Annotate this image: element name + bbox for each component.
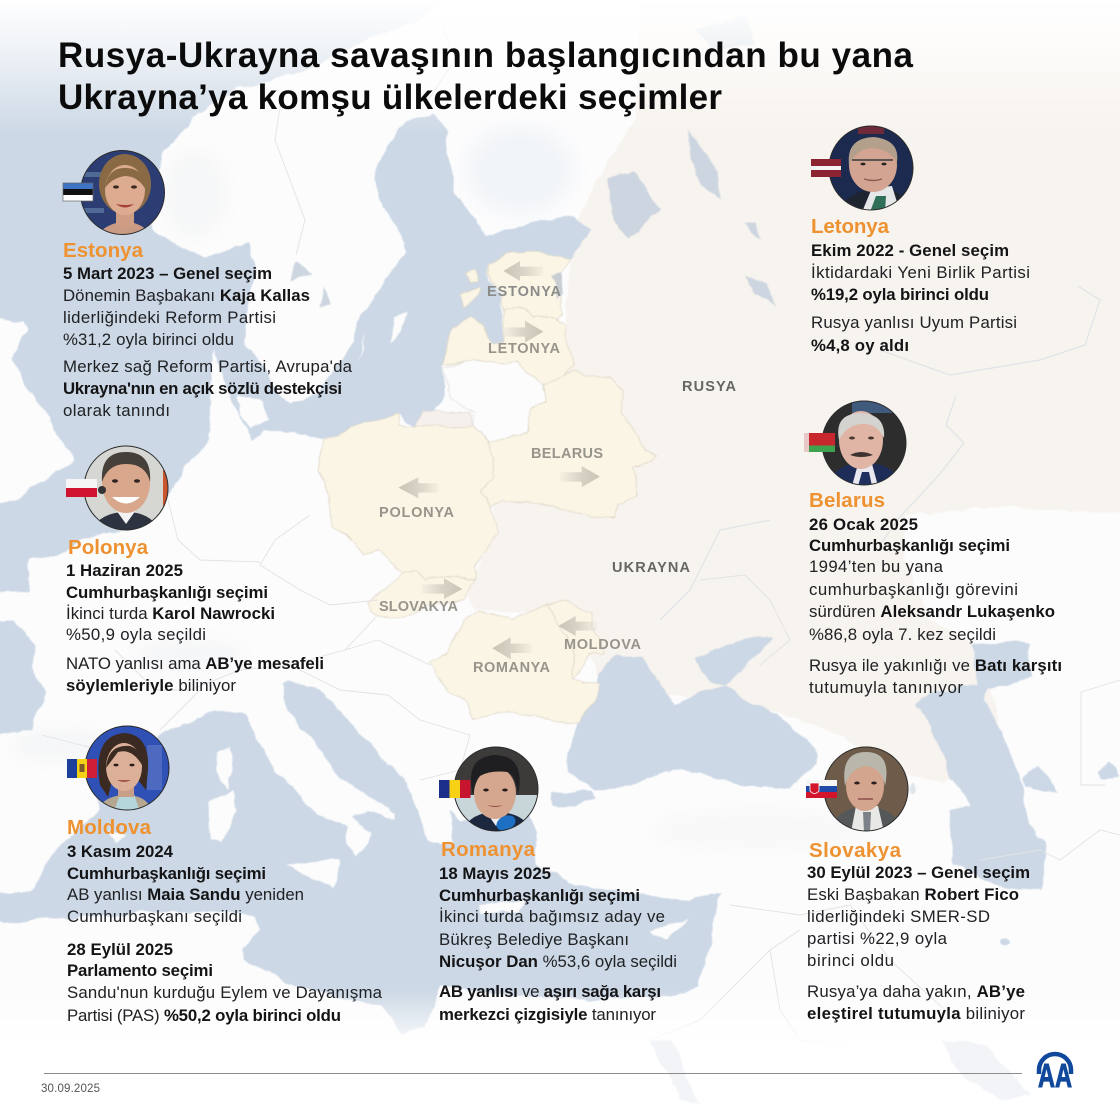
title [58, 36, 914, 117]
bottom fade [0, 990, 1120, 1050]
text: election details: 5 Mart 2023 – Genel seçim [63, 264, 272, 283]
footer rule [44, 1073, 1022, 1074]
arrow: Romania turns west [492, 637, 532, 659]
text: election details: Ekim 2022 - Genel seçim [811, 241, 1009, 260]
rivers, Russia [660, 286, 1100, 620]
text: election details: söylemleriyle biliniyor [66, 676, 236, 695]
label: Romanya: ROMANYA [473, 660, 551, 676]
text: election details: Cumhurbaşkanlığı seçimi [809, 536, 1010, 555]
panel: Moldova [67, 726, 383, 1025]
heading: Moldova: Moldova [67, 816, 152, 839]
text: election details: birinci oldu [807, 951, 894, 970]
text: election details: AB yanlısı ve aşırı sağa karşı [439, 982, 661, 1001]
text: election details: 3 Kasım 2024 [67, 842, 174, 861]
text: election details: Cumhurbaşkanı seçildi [67, 907, 242, 926]
text: election details: Sandu'nun kurduğu Eylem ve Dayanışma [67, 983, 383, 1002]
Kaliningrad [413, 410, 473, 427]
text: election details: Rusya yanlısı Uyum Partisi [811, 313, 1017, 332]
date: 30.09.2025 [41, 1083, 100, 1095]
logo: AA [1038, 1054, 1072, 1094]
text: election details: İkinci turda Karol Nawrocki [66, 604, 275, 623]
text: election details: sürdüren Aleksandr Lukaşenko [809, 602, 1055, 621]
country: Estonia [460, 252, 572, 320]
heading: Polonya: Polonya [68, 536, 149, 559]
arrow: Latvia turns east [503, 321, 543, 343]
text: election details: Rusya’ya daha yakın, AB’ye [807, 982, 1025, 1001]
label: Moldova: MOLDOVA [564, 637, 642, 653]
text: election details [66, 561, 324, 695]
text: election details [807, 863, 1030, 1023]
arrow: Poland turns west [398, 477, 438, 498]
country: Moldova [547, 600, 605, 678]
text: election details: cumhurbaşkanlığı görevini [809, 580, 1018, 599]
panel: Slovakya [806, 747, 1030, 1023]
text: election details: Nicuşor Dan %53,6 oyla seçildi [439, 952, 677, 971]
text: election details: liderliğindeki Reform Partisi [63, 308, 276, 327]
logo: AA: AA [1038, 1057, 1072, 1094]
Lithuania [443, 362, 547, 442]
text: election details: merkezci çizgisiyle tanınıyor [439, 1005, 656, 1024]
portrait: Kaja Kallas [80, 150, 166, 236]
flag: Slovakia [806, 780, 837, 798]
label: Belarus: BELARUS [531, 446, 603, 462]
Italy [245, 681, 396, 856]
text: election details: Cumhurbaşkanlığı seçimi [66, 583, 268, 602]
heading: Romanya: Romanya [441, 838, 536, 861]
text: election details: Dönemin Başbakanı Kaja Kallas [63, 286, 310, 305]
flag: Belarus [804, 433, 835, 452]
Caspian Sea and Kara-Bogaz [911, 642, 1119, 947]
flag: Poland [66, 479, 97, 497]
text: election details: 30 Eylül 2023 – Genel seçim [807, 863, 1030, 882]
text: election details [809, 515, 1062, 697]
arrow: Estonia turns west [503, 261, 543, 281]
text: election details: %50,9 oyla seçildi [66, 625, 206, 644]
Mediterranean islands [107, 746, 341, 888]
United Kingdom [0, 318, 73, 507]
text: election details: %19,2 oyla birinci oldu [811, 285, 989, 304]
text: election details: 1994’ten bu yana [809, 557, 944, 576]
portrait: Karol Nawrocki [84, 446, 169, 532]
Mediterranean Sea [0, 681, 721, 1035]
title: Ukrayna’ya komşu ülkelerdeki seçimler [58, 78, 722, 117]
heading: Belarus: Belarus [809, 489, 885, 512]
Bay of Biscay [0, 621, 46, 735]
text: election details: %4,8 oy aldı [811, 336, 909, 355]
panel: Belarus [804, 401, 1062, 697]
panel: Polonya [66, 446, 324, 695]
text: election details: %86,8 oyla 7. kez seçildi [809, 625, 996, 644]
panel: Letonya [811, 126, 1030, 355]
heading: Letonya: Letonya [811, 215, 890, 238]
portrait: Edgars Rinkevics [829, 126, 913, 212]
title: Rusya-Ukrayna savaşının başlangıcından bu yana [58, 36, 914, 75]
text: election details: Merkez sağ Reform Partisi, Avrupa'da [63, 357, 353, 376]
country: Slovakia [368, 570, 475, 618]
text: election details: partisi %22,9 oyla [807, 929, 948, 948]
heading: Estonya: Estonya [63, 239, 144, 262]
Russia and Ukraine area [467, 0, 1120, 782]
text: election details: İkinci turda bağımsız aday ve [439, 907, 665, 926]
text: election details: İktidardaki Yeni Birlik Partisi [811, 263, 1030, 282]
lakes [290, 15, 775, 310]
heading: Slovakya: Slovakya [809, 839, 902, 862]
text: election details: NATO yanlısı ama AB’ye mesafeli [66, 654, 324, 673]
portrait: Aleksandr Lukaşenko [822, 401, 906, 486]
text: election details: %31,2 oyla birinci oldu [63, 330, 234, 349]
portrait: Robert Fico [824, 747, 908, 832]
country: Belarus [482, 372, 657, 518]
top fade [0, 0, 1120, 135]
map arrows [398, 261, 600, 659]
country: Romania [430, 605, 600, 723]
label: Polonya: POLONYA [379, 505, 455, 521]
portrait: Maia Sandu [85, 726, 169, 812]
North Atlantic, North Sea and Baltic [0, 0, 590, 596]
text: election details: Partisi (PAS) %50,2 oyla birinci oldu [67, 1006, 341, 1025]
flag: Estonia [63, 183, 93, 201]
arrow: Belarus turns east [560, 466, 600, 487]
relief texture [10, 125, 870, 850]
text: election details: Rusya ile yakınlığı ve Batı karşıtı [809, 656, 1062, 675]
panel: Estonya [63, 150, 353, 420]
panel: Romanya [439, 747, 677, 1024]
text: election details [63, 264, 353, 420]
text: election details [67, 842, 383, 1025]
text: election details: Parlamento seçimi [67, 961, 213, 980]
text: election details: Cumhurbaşkanlığı seçimi [439, 886, 640, 905]
highlighted countries on the map [318, 252, 657, 723]
text: election details: 26 Ocak 2025 [809, 515, 918, 534]
text: election details [439, 864, 677, 1024]
flag: Latvia [811, 159, 841, 177]
flag: Romania [439, 780, 470, 798]
label: Ukrayna: UKRAYNA [612, 560, 691, 576]
text: election details: 18 Mayıs 2025 [439, 864, 551, 883]
Black Sea and Azov [551, 637, 817, 806]
text: election details: liderliğindeki SMER-SD [807, 907, 990, 926]
text: election details: 1 Haziran 2025 [66, 561, 183, 580]
text: election details: eleştirel tutumuyla biliniyor [807, 1004, 1025, 1023]
label: Rusya: RUSYA [682, 379, 737, 395]
text: election details: AB yanlısı Maia Sandu yeniden [67, 885, 304, 904]
text: election details: 28 Eylül 2025 [67, 940, 173, 959]
label: Estonya: ESTONYA [487, 284, 562, 300]
text: election details: olarak tanındı [63, 401, 170, 420]
arrow: Slovakia turns east [422, 578, 462, 599]
arrow: Moldova turns west [558, 616, 597, 636]
text: election details [811, 241, 1030, 355]
country: Poland [318, 413, 498, 582]
text: election details: Ukrayna'nın en açık sözlü destekçisi [63, 379, 342, 398]
text: election details: Cumhurbaşkanlığı seçimi [67, 864, 266, 883]
text: election details: Bükreş Belediye Başkanı [439, 930, 629, 949]
map labels [379, 284, 737, 676]
label: Slovakya: SLOVAKYA [379, 599, 459, 615]
flag: Moldova [67, 759, 97, 778]
text: election details: Eski Başbakan Robert Fico [807, 885, 1019, 904]
faded Red Sea and Persian Gulf [650, 1040, 1030, 1105]
text: election details: tutumuyla tanınıyor [809, 678, 963, 697]
label: Letonya: LETONYA [488, 341, 561, 357]
Baltic islands [238, 395, 268, 428]
country: Latvia [443, 306, 573, 385]
portrait: Nicuşor Dan [454, 747, 538, 834]
